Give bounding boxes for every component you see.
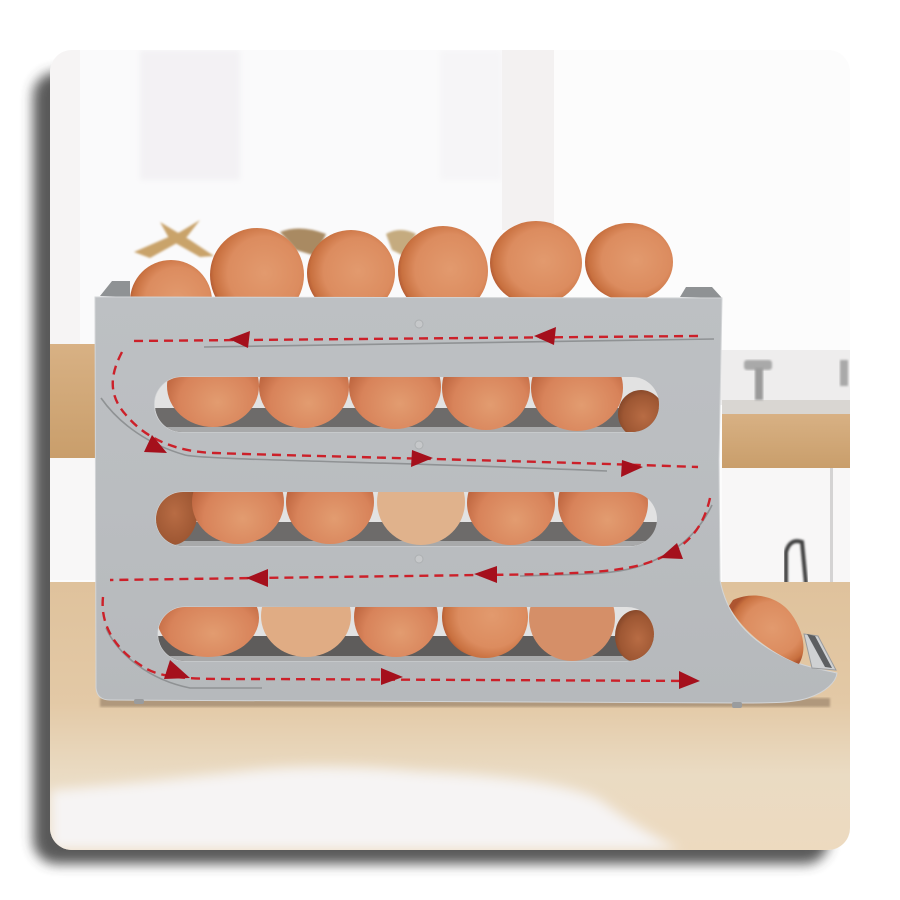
photo background: kitchen scene — [50, 50, 850, 850]
tray top rim — [100, 281, 722, 298]
molded grooves — [101, 339, 714, 688]
rack body — [95, 297, 837, 708]
slot 3 interior with eggs — [158, 607, 654, 661]
front lip of dispenser — [804, 634, 836, 670]
screw dots — [415, 320, 423, 328]
right counter with sink and cabinets — [720, 350, 850, 586]
table shadow under rack — [100, 698, 830, 707]
top row of eggs — [130, 221, 673, 298]
white reflection on table — [50, 767, 680, 850]
photo drop shadow — [33, 72, 829, 864]
dispensed egg — [729, 596, 803, 664]
flow arrows: red dashed path — [103, 327, 710, 689]
arrowheads — [144, 327, 700, 689]
slot 1 interior with eggs — [155, 377, 659, 432]
table top — [50, 582, 850, 850]
slot 2 interior with eggs — [156, 492, 657, 546]
left counter — [50, 344, 95, 458]
blurred pastry on the shelf — [134, 220, 416, 258]
window and curtain — [142, 50, 554, 230]
feet — [134, 699, 144, 704]
wall — [50, 50, 850, 850]
